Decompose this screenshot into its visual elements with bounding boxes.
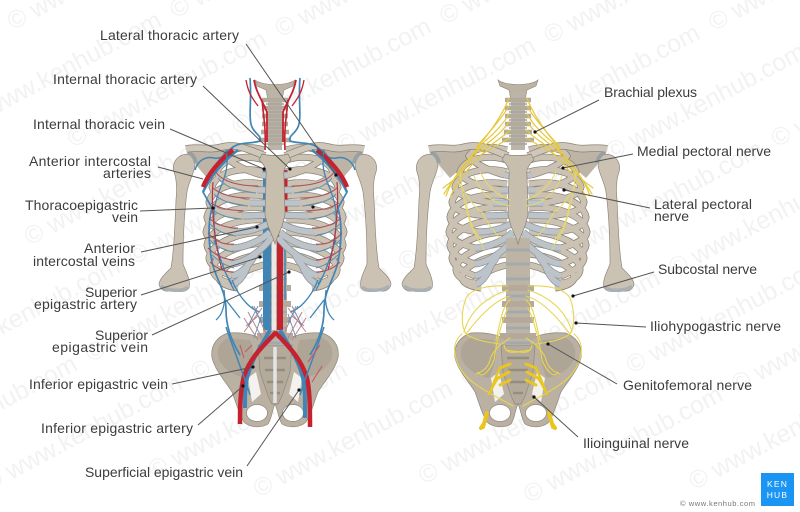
label: superficial epigastric vein: Superficial epigastric vein: [85, 464, 243, 480]
nerves: left side: [443, 98, 530, 428]
blood vessels: left side: [195, 78, 267, 355]
nerves: right side: [506, 98, 593, 428]
labels: arteries and veins: [25, 27, 243, 480]
label: iliohypogastric nerve: Iliohypogastric nerve: [650, 318, 781, 334]
leader lines with endpoint dots: [140, 44, 654, 466]
label: genitofemoral nerve: Genitofemoral nerve: [623, 377, 752, 393]
label: thoracoepigastric vein: Thoracoepigastric: [25, 197, 138, 213]
label: anterior intercostal veins: Anterior: [84, 240, 135, 256]
blood vessels: right side: [283, 78, 355, 355]
kenhub logo: HUB: [767, 490, 788, 500]
figure: torso skeleton with nerves: [402, 80, 634, 428]
labels: nerves: [583, 84, 781, 451]
label: lateral thoracic artery: Lateral thoracic artery: [100, 27, 239, 43]
label: inferior epigastric vein: Inferior epigastric vein: [29, 376, 168, 392]
costal cartilages over central vessels: [232, 154, 318, 284]
label: anterior intercostal arteries: arteries: [103, 165, 151, 181]
label: inferior epigastric artery: Inferior epigastric artery: [41, 420, 193, 436]
label: lateral pectoral nerve: Lateral pectoral: [654, 196, 752, 212]
label: superior epigastric artery: Superior: [85, 284, 137, 300]
skeleton: right figure: [402, 80, 634, 427]
copyright line: © www.kenhub.com: [680, 499, 755, 508]
label: lateral pectoral nerve: nerve: [654, 208, 689, 224]
label: superior epigastric vein: epigastric vein: [52, 339, 148, 355]
label: subcostal nerve: Subcostal nerve: [658, 261, 757, 277]
label: ilioinguinal nerve: Ilioinguinal nerve: [583, 435, 689, 451]
label: medial pectoral nerve: Medial pectoral nerve: [637, 143, 771, 159]
label: superior epigastric artery: epigastric artery: [34, 296, 137, 312]
label: anterior intercostal veins: intercostal veins: [33, 253, 135, 269]
label: anterior intercostal arteries: Anterior intercostal: [29, 153, 151, 169]
skeleton: left figure: [159, 80, 391, 427]
label: internal thoracic vein: Internal thoracic vein: [33, 116, 165, 132]
kenhub logo: [761, 473, 794, 506]
label: superior epigastric vein: Superior: [95, 327, 148, 343]
figure: torso skeleton with arteries and veins: [159, 78, 391, 427]
label: internal thoracic artery: Internal thoracic artery: [53, 71, 197, 87]
inferior epigastric artery and vein: [226, 327, 324, 427]
label: brachial plexus: Brachial plexus: [604, 84, 697, 100]
central internal thoracic and superior epigastric vessels: [266, 170, 285, 403]
kenhub logo: KEN: [767, 479, 788, 489]
label: thoracoepigastric vein: vein: [112, 209, 138, 225]
